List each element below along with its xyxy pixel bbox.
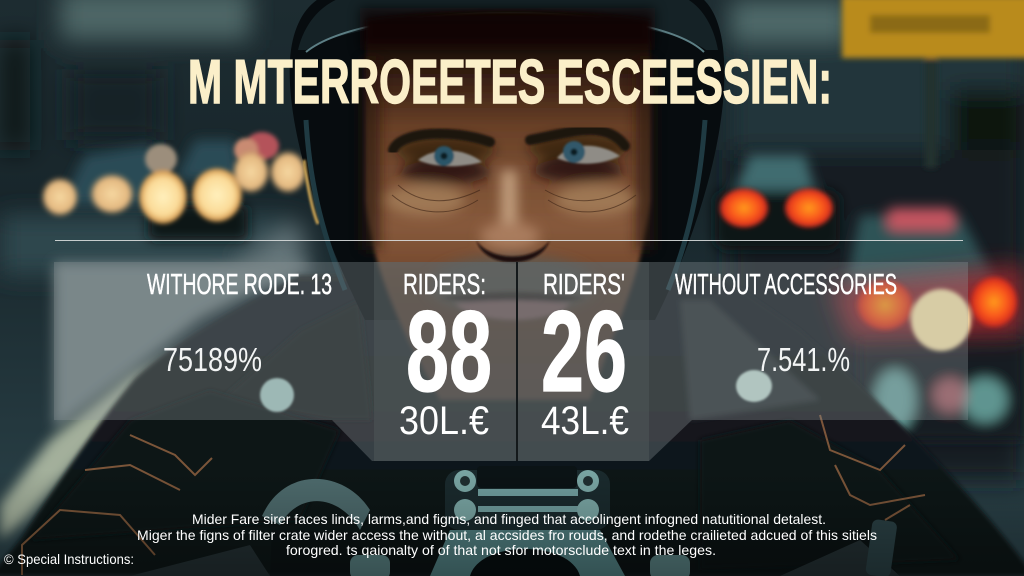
sub value: 43L: 43L.€ [541, 399, 629, 443]
footnote text block [137, 511, 877, 558]
road sign [842, 0, 1024, 168]
label: without accessories: WITHOUT ACCESSORIES [675, 269, 897, 301]
center divider [516, 262, 518, 461]
footnote text block: forogred. ts qaionalty of of that not sfor motorsclude text in the leges. [286, 542, 716, 558]
traffic tail lights [715, 155, 1024, 440]
forehead shadow [360, 8, 655, 50]
wrinkles [392, 185, 636, 212]
helmet [290, 0, 724, 320]
jacket buttons [260, 370, 772, 412]
lips [440, 292, 585, 320]
panel: right comparison [518, 262, 968, 461]
panel: left comparison [54, 262, 516, 461]
road surface left and edge line [0, 262, 310, 540]
center dark column [518, 262, 649, 461]
divider line [55, 240, 963, 241]
center dark column [374, 262, 516, 461]
footnote text block: Mider Fare sirer faces linds, larms,and figms, and finged that accolingent infogned natutitional detalest. [192, 511, 826, 527]
cheek and nose highlights [385, 134, 635, 315]
label: without rode: WITHORE RODE. 13 [147, 269, 332, 301]
sub value: 30L: 30L.€ [399, 399, 489, 443]
value: 88: 88 [406, 288, 492, 416]
nostrils [476, 240, 550, 262]
jacket orange stitching [22, 415, 925, 575]
value: left percent: 75189% [163, 341, 262, 378]
handlebars and instrument mount [130, 466, 900, 576]
footnote text block: Miger the figns of filter crate wider access the without, al accsides fro rouds, and rodethe crailieted adcued of this sitiels [137, 527, 877, 543]
eyes [418, 141, 620, 166]
rider face [360, 8, 655, 400]
vignette at bottom [0, 470, 1024, 576]
label: riders right: RIDERS' [543, 269, 625, 301]
value: 26: 26 [541, 288, 627, 416]
face edge shading [362, 60, 654, 250]
value: right percent: 7.541.% [757, 341, 850, 378]
oncoming cars with headlights [40, 132, 308, 240]
copyright note: © Special Instructions: [4, 551, 134, 567]
label: riders left: RIDERS: [403, 269, 486, 301]
eyebrows [393, 130, 625, 150]
rider jacket [0, 275, 1024, 576]
